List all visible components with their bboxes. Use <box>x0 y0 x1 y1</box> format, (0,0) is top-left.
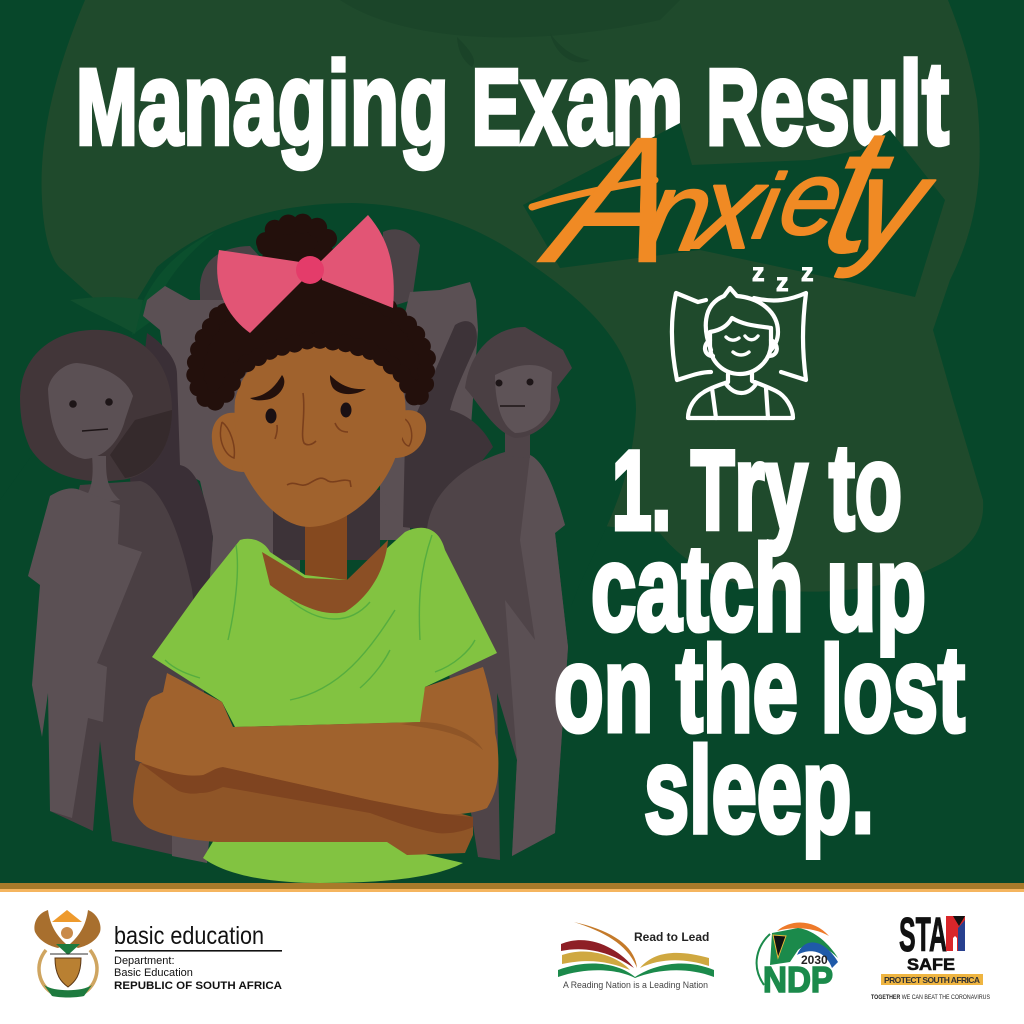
icon: zzz sleep letters: z <box>801 259 814 287</box>
icon: zzz sleep letters <box>752 259 814 297</box>
subtitle: Anxiety: A <box>528 99 700 301</box>
logo: Read to Lead <box>558 922 714 990</box>
logo text: basic education department: REPUBLIC OF SOUTH AFRICA <box>114 980 282 992</box>
face <box>235 338 406 527</box>
subtitle: Anxiety: x <box>682 142 778 274</box>
white footer panel <box>0 892 1024 1024</box>
logo: Stay Safe: STA <box>899 909 947 962</box>
logo: NDP 2030: 2030 <box>801 953 828 967</box>
logo: Stay Safe <box>871 909 990 1001</box>
logo: Read to Lead: A Reading Nation is a Leading Nation <box>563 980 708 990</box>
shirt folds <box>165 535 475 700</box>
tip text: 1. Try to catch up on the lost sleep.: sleep. <box>644 722 874 858</box>
logo text: basic education department <box>114 922 282 992</box>
icon: zzz sleep letters: z <box>752 259 764 287</box>
subtitle: Anxiety: n <box>635 148 724 274</box>
shadow figure: back head right <box>380 229 420 310</box>
gold footer stripe <box>0 883 1024 892</box>
subtitle: Anxiety: e <box>771 140 854 257</box>
tip text: 1. Try to catch up on the lost sleep. <box>554 419 965 858</box>
neck <box>305 510 347 600</box>
logo: NDP 2030: NDP <box>763 959 833 1000</box>
logo text: basic education department: Basic Education <box>114 967 193 979</box>
logo: Stay Safe: PROTECT SOUTH AFRICA <box>884 975 980 985</box>
logo: coat of arms <box>34 910 100 998</box>
curly hair <box>194 275 427 404</box>
logo: Stay Safe: SAFE <box>907 955 955 974</box>
tip text: 1. Try to catch up on the lost sleep.: 1. Try to <box>612 419 902 555</box>
bow <box>217 250 303 333</box>
subtitle: Anxiety: y <box>834 131 946 279</box>
eyebrows <box>250 375 284 400</box>
icon: sleeping person on pillow <box>672 288 806 418</box>
shadow figure: back head left <box>200 246 300 600</box>
green shirt <box>152 528 497 727</box>
ears <box>212 413 248 472</box>
shadow figure: grey back left <box>143 286 275 620</box>
lower forearm <box>133 763 473 855</box>
illustration: crowd of shadow people <box>20 229 572 863</box>
shadow figure: left front <box>20 330 207 863</box>
shadow figure: right front <box>427 327 572 860</box>
eyes <box>266 408 276 424</box>
title: Managing Exam Result: Managing Exam Result <box>76 38 949 170</box>
logo text: basic education department: Department: <box>114 955 175 967</box>
illustration: anxious girl <box>133 215 498 883</box>
logo: NDP 2030 <box>757 922 838 1000</box>
subtitle: Anxiety: t <box>809 89 909 291</box>
hair bun <box>266 222 328 262</box>
logo: Stay Safe: TOGETHER WE CAN BEAT THE CORONAVIRUS <box>871 995 990 1001</box>
logo: Read to Lead: Read to Lead <box>634 930 709 944</box>
shadow figure: dark back left <box>130 333 213 640</box>
upper forearm and hand <box>135 667 498 814</box>
dark arm shadow <box>140 763 473 833</box>
nose and wavy mouth <box>275 393 351 487</box>
shadow figure: grey back right <box>380 282 478 520</box>
collar and chest <box>262 540 388 613</box>
subtitle: Anxiety: i <box>746 155 791 258</box>
shadow patch lower left <box>172 800 213 863</box>
shadow figure: dark back right <box>403 321 493 530</box>
shadow figure: dark centre behind neck <box>273 490 380 560</box>
shirt hem bottom <box>203 835 463 883</box>
subtitle: Anxiety <box>528 89 955 301</box>
icon: zzz sleep letters: z <box>776 269 788 297</box>
logo text: basic education department: basic education <box>114 922 264 950</box>
dark halo behind Anxiety <box>523 123 945 297</box>
